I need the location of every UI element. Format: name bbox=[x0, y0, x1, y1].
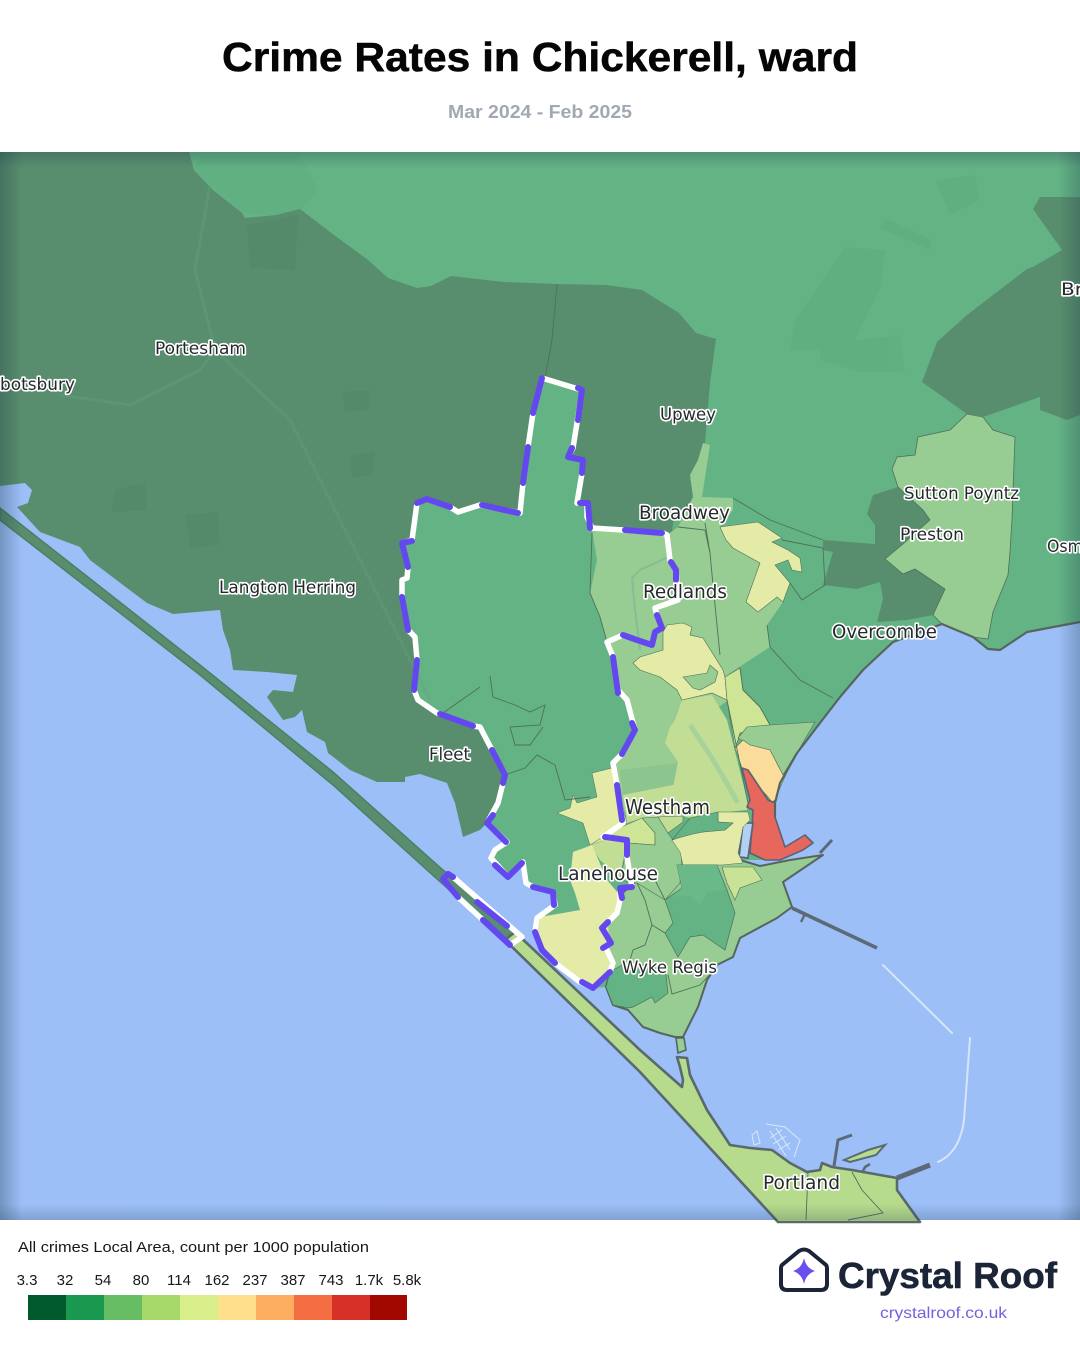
place labels: Westham bbox=[625, 795, 710, 819]
place labels: Overcombe bbox=[832, 621, 937, 643]
legend colour ramp bbox=[28, 1295, 407, 1320]
legend scale values: 1.7k bbox=[355, 1272, 384, 1289]
icon: house with star bbox=[781, 1250, 827, 1290]
coast edge east bbox=[775, 622, 1080, 817]
Chesil Beach strip bbox=[0, 508, 523, 947]
place labels: Sutton Poyntz bbox=[904, 484, 1019, 504]
pale ward centre, Littlemoor bbox=[633, 623, 727, 700]
place labels: Upwey bbox=[660, 405, 716, 425]
top right dark area bbox=[922, 197, 1080, 420]
harbour wall bbox=[820, 840, 832, 853]
large yellow-green ward, Radipole bbox=[665, 695, 748, 813]
mid green sliver bbox=[672, 812, 733, 840]
yellow-green ward Wyke north-east bbox=[722, 867, 762, 900]
marina outlines bbox=[752, 1124, 800, 1157]
darker box, Westham north bbox=[620, 763, 683, 795]
Portland harbour piers bbox=[834, 1135, 930, 1178]
place labels: Preston bbox=[900, 525, 964, 545]
place labels: Broadwey bbox=[639, 502, 730, 524]
place labels: Fleet bbox=[429, 745, 470, 765]
legend scale values: 387 bbox=[280, 1272, 306, 1289]
brand name: Crystal Roof bbox=[838, 1255, 1058, 1296]
ward border lines bbox=[443, 284, 833, 803]
small yellow-green wedge bbox=[658, 816, 683, 833]
date range subtitle: Mar 2024 - Feb 2025 bbox=[448, 102, 632, 122]
legend bbox=[17, 1239, 422, 1320]
dark green low-crime area (west) bbox=[0, 152, 716, 837]
Preston dark ward bbox=[823, 487, 945, 622]
legend scale values: 32 bbox=[57, 1272, 73, 1289]
Westham and Redlands light green bbox=[590, 443, 783, 812]
subtle field patches in the north bbox=[194, 155, 980, 372]
place labels: Portland bbox=[763, 1172, 840, 1194]
place labels: Langton Herring bbox=[219, 578, 356, 598]
pale Lanehouse and south Chickerell ward bbox=[537, 845, 620, 988]
title: Crime Rates in Chickerell, ward bbox=[222, 34, 858, 80]
brand logo bbox=[781, 1250, 1058, 1322]
legend scale values: 162 bbox=[204, 1272, 230, 1289]
legend scale values: 80 bbox=[133, 1272, 149, 1289]
place labels: Wyke Regis bbox=[622, 958, 717, 978]
water-meadow stream bbox=[632, 558, 666, 650]
legend scale values: 743 bbox=[318, 1272, 344, 1289]
dark field texture bbox=[112, 215, 375, 548]
light green coastal ward bbox=[738, 722, 815, 775]
Chickerell ward boundary, white base bbox=[402, 378, 678, 988]
light ward Westham centre bbox=[590, 842, 627, 878]
place labels: Lanehouse bbox=[558, 863, 658, 885]
place labels bbox=[0, 280, 1080, 1194]
orange ward bbox=[735, 740, 795, 802]
south Weymouth base, light green bbox=[602, 845, 823, 1037]
place labels: Br bbox=[1061, 280, 1080, 300]
inset light green bbox=[683, 665, 718, 690]
mid green ward, Wyke east bbox=[665, 865, 735, 957]
place labels: botsbury bbox=[0, 375, 75, 395]
legend title: All crimes Local Area, count per 1000 population bbox=[18, 1239, 369, 1256]
pale Westham ward bbox=[557, 768, 627, 845]
small island bbox=[844, 1145, 885, 1162]
legend scale values: 5.8k bbox=[393, 1272, 422, 1289]
land base: mid green wards bbox=[189, 152, 1080, 988]
legend scale values: 54 bbox=[95, 1272, 111, 1289]
short jetty bbox=[801, 914, 805, 922]
marina bbox=[739, 823, 753, 858]
place labels: Portesham bbox=[155, 339, 246, 359]
yellow-green ward south of Westham bbox=[590, 818, 655, 845]
stone pier bbox=[792, 908, 877, 948]
white breakwaters bbox=[883, 965, 970, 1162]
red town-centre ward bbox=[742, 768, 813, 860]
choropleth map bbox=[0, 152, 1080, 1222]
Portland ward lines bbox=[806, 1172, 808, 1220]
map edge vignette bbox=[0, 152, 1080, 1220]
light east Westham bbox=[620, 817, 682, 900]
Wyke tip bbox=[676, 1038, 686, 1053]
upper part of mid ward bbox=[672, 865, 725, 905]
legend scale values: 3.3 bbox=[17, 1272, 37, 1289]
pale ward top right, Broadwey bbox=[720, 522, 802, 612]
road lines on dark area bbox=[60, 185, 430, 700]
mid green ward, Wyke Regis south bbox=[606, 965, 668, 1008]
Radipole lake tint bbox=[690, 725, 738, 803]
Sutton Poyntz light green ward bbox=[885, 414, 1015, 639]
sea bbox=[0, 152, 1080, 1220]
legend scale values: 114 bbox=[167, 1272, 191, 1289]
Chickerell ward boundary, purple dashes bbox=[402, 378, 676, 988]
place labels: Redlands bbox=[643, 581, 727, 603]
yellow-green strip, Melcombe north bbox=[725, 668, 770, 748]
legend scale values bbox=[17, 1272, 422, 1289]
ward outlines south bbox=[630, 880, 716, 994]
Portland and beach, light green bbox=[505, 932, 920, 1222]
pale big ward east Westham bbox=[672, 812, 750, 865]
website: crystalroof.co.uk bbox=[880, 1305, 1008, 1322]
yellow-green ward under the Westham label bbox=[623, 783, 717, 823]
legend scale values: 237 bbox=[242, 1272, 268, 1289]
